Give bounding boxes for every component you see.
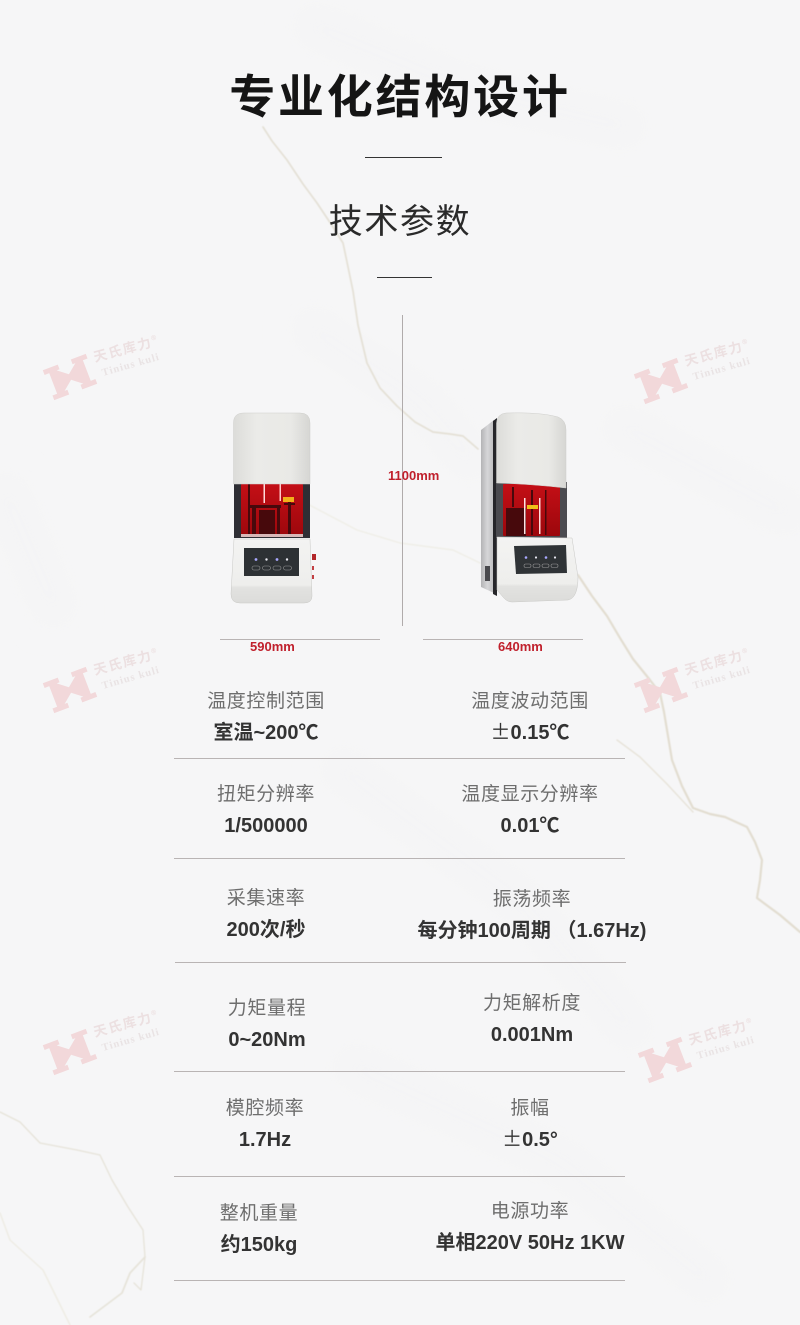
watermark: lower left: Tinius kuli xyxy=(101,1027,161,1054)
watermark: top left: ® xyxy=(150,333,159,343)
watermark: lower left: 天氏库力 xyxy=(92,1010,154,1040)
spec: 振荡频率: 每分钟100周期 （1.67Hz) xyxy=(418,920,646,942)
watermark: lower right xyxy=(638,1015,756,1083)
watermark: middle left xyxy=(43,645,161,713)
watermark: upper right: Tinius kuli xyxy=(692,356,752,383)
spec: 扭矩分辨率: 扭矩分辨率 xyxy=(217,784,315,805)
spec: 整机重量: 整机重量 xyxy=(220,1203,298,1224)
spec: 采集速率: 200次/秒 xyxy=(227,919,305,941)
watermark: top left xyxy=(43,332,161,400)
watermark: lower left: ® xyxy=(150,1008,159,1018)
spec: 温度控制范围: 温度控制范围 xyxy=(207,691,325,712)
watermark: middle left: Tinius kuli xyxy=(101,665,161,692)
watermark: top left: 天氏库力 xyxy=(92,335,154,365)
watermark: middle right: 天氏库力 xyxy=(683,648,745,678)
spec: 整机重量: 约150kg xyxy=(221,1234,297,1256)
watermark: upper right: 天氏库力 xyxy=(683,339,745,369)
watermark: middle right: ® xyxy=(741,646,750,656)
watermark: lower right: Tinius kuli xyxy=(696,1035,756,1062)
spec: 力矩量程: 0~20Nm xyxy=(228,1029,306,1051)
machine: front view xyxy=(230,412,316,604)
spec: 温度控制范围 xyxy=(207,691,325,744)
spec: 振荡频率 xyxy=(418,888,646,942)
watermark: middle right xyxy=(634,645,752,713)
spec: 模腔频率: 1.7Hz xyxy=(239,1129,291,1151)
watermark: lower left xyxy=(43,1007,161,1075)
spec: 温度显示分辨率: 温度显示分辨率 xyxy=(461,784,599,805)
product diagram with dimensions xyxy=(220,315,583,654)
watermark: lower right: ® xyxy=(745,1016,754,1026)
spec: 力矩量程: 力矩量程 xyxy=(228,998,306,1019)
spec: 振幅: 振幅 xyxy=(510,1098,550,1119)
width dimension: 590mm: 590mm xyxy=(250,639,295,654)
machine: angled view xyxy=(481,412,578,602)
watermark: middle right: Tinius kuli xyxy=(692,665,752,692)
watermark: top left: Tinius kuli xyxy=(101,352,161,379)
spec: 温度显示分辨率: 0.01℃ xyxy=(501,815,559,837)
watermark: upper right: ® xyxy=(741,337,750,347)
spec: 力矩解析度 xyxy=(483,993,581,1046)
spec: 振幅 xyxy=(502,1098,558,1152)
watermark: middle left: 天氏库力 xyxy=(92,648,154,678)
watermark: middle left: ® xyxy=(150,646,159,656)
spec: 采集速率: 采集速率 xyxy=(227,888,305,909)
spec: 整机重量 xyxy=(220,1203,298,1256)
spec: 采集速率 xyxy=(227,888,305,941)
spec: 扭矩分辨率 xyxy=(217,784,315,837)
spec: 电源功率 xyxy=(436,1200,624,1254)
watermark: lower right: 天氏库力 xyxy=(687,1018,749,1048)
spec: 模腔频率: 模腔频率 xyxy=(226,1098,304,1119)
section heading: 技术参数 xyxy=(329,203,471,241)
spec: 模腔频率 xyxy=(226,1098,304,1151)
spec: 力矩量程 xyxy=(228,998,306,1051)
spec: 振荡频率: 振荡频率 xyxy=(493,889,571,910)
spec: 振幅: ±0.5° xyxy=(502,1123,558,1152)
height dimension: 1100mm xyxy=(388,468,439,483)
spec: 温度波动范围: 温度波动范围 xyxy=(471,691,589,712)
spec: 力矩解析度: 0.001Nm xyxy=(491,1024,573,1046)
spec: 电源功率: 单相220V 50Hz 1KW xyxy=(436,1232,624,1254)
spec: 电源功率: 电源功率 xyxy=(491,1201,569,1222)
width dimension: 640mm: 640mm xyxy=(498,639,543,654)
spec: 温度显示分辨率 xyxy=(461,784,599,837)
spec: 扭矩分辨率: 1/500000 xyxy=(224,815,308,837)
spec: 温度控制范围: 室温~200℃ xyxy=(213,722,319,744)
watermark: upper right xyxy=(634,336,752,404)
spec: 温度波动范围 xyxy=(471,691,589,745)
spec: 温度波动范围: ±0.15℃ xyxy=(491,716,569,745)
title: 专业化结构设计 xyxy=(229,71,571,123)
spec: 力矩解析度: 力矩解析度 xyxy=(483,993,581,1014)
